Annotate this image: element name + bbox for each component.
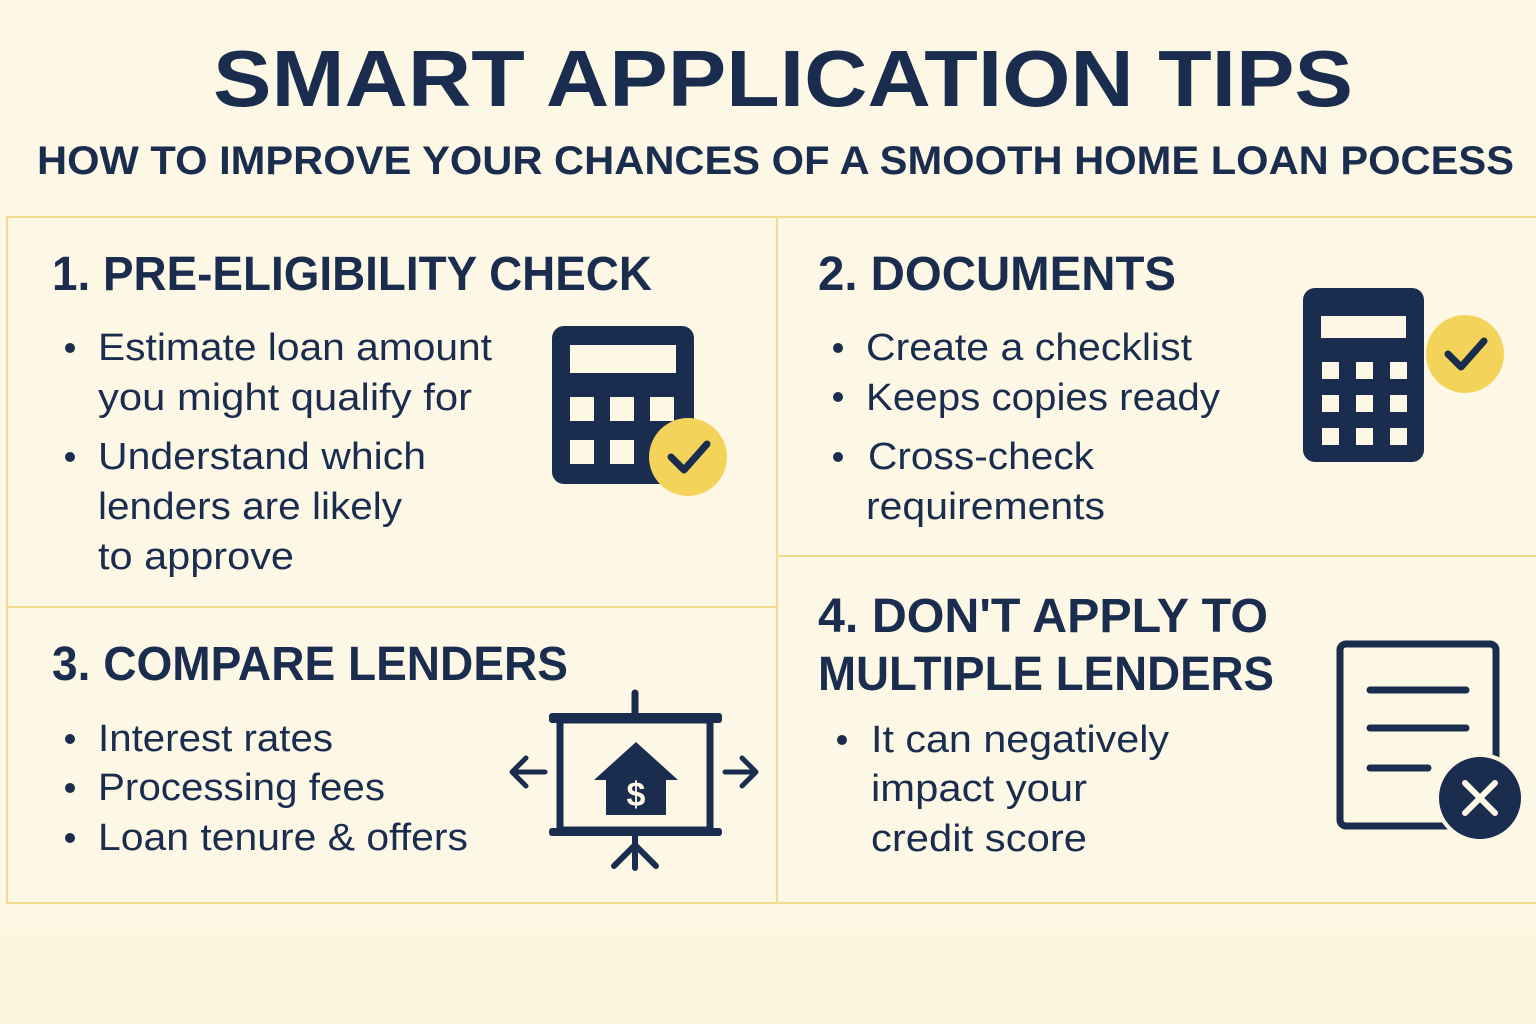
panel: pre-eligibility check bbox=[52, 248, 727, 578]
bullets 2 bbox=[833, 327, 1220, 528]
bullets 3 bbox=[65, 718, 468, 859]
bullets 3: Interest rates bbox=[98, 718, 333, 760]
bullets 2: Create a checklist bbox=[866, 327, 1192, 369]
heading 2: 2. DOCUMENTS bbox=[818, 248, 1176, 301]
bullets 1 bbox=[65, 327, 492, 578]
panel: don't apply to multiple lenders bbox=[818, 590, 1523, 860]
icon: presentation board with house: $ bbox=[627, 776, 646, 814]
panel: documents bbox=[818, 248, 1504, 528]
icon: calculator with check bbox=[552, 326, 727, 496]
heading 3: 3. COMPARE LENDERS bbox=[52, 638, 568, 691]
icon: document with X bbox=[1340, 644, 1523, 841]
bullets 2: Cross-check bbox=[868, 436, 1095, 478]
heading 4 bbox=[818, 590, 1274, 701]
bullets 1: you might qualify for bbox=[98, 377, 472, 419]
bullets 4: credit score bbox=[871, 818, 1087, 860]
bullets 4: impact your bbox=[871, 768, 1087, 810]
bullets 2: requirements bbox=[866, 486, 1105, 528]
panel: compare lenders bbox=[52, 638, 756, 868]
bullets 4: It can negatively bbox=[871, 719, 1169, 761]
bullets 3: Loan tenure & offers bbox=[98, 817, 468, 859]
title: SMART APPLICATION TIPS bbox=[213, 34, 1353, 123]
heading 1: 1. PRE-ELIGIBILITY CHECK bbox=[52, 248, 652, 301]
bullets 2: Keeps copies ready bbox=[866, 377, 1220, 419]
bullets 1: to approve bbox=[98, 536, 294, 578]
bullets 4 bbox=[837, 719, 1169, 860]
heading 4: 4. DON'T APPLY TO bbox=[818, 590, 1268, 643]
bullets 1: lenders are likely bbox=[98, 486, 402, 528]
bullets 1: Estimate loan amount bbox=[98, 327, 492, 369]
icon: calculator with check 2 bbox=[1303, 288, 1504, 462]
bullets 3: Processing fees bbox=[98, 767, 385, 809]
icon: presentation board with house bbox=[512, 693, 756, 868]
bullets 1: Understand which bbox=[98, 436, 426, 478]
subtitle: HOW TO IMPROVE YOUR CHANCES OF A SMOOTH HOME LOAN POCESS bbox=[37, 139, 1514, 183]
heading 4: MULTIPLE LENDERS bbox=[818, 648, 1274, 701]
